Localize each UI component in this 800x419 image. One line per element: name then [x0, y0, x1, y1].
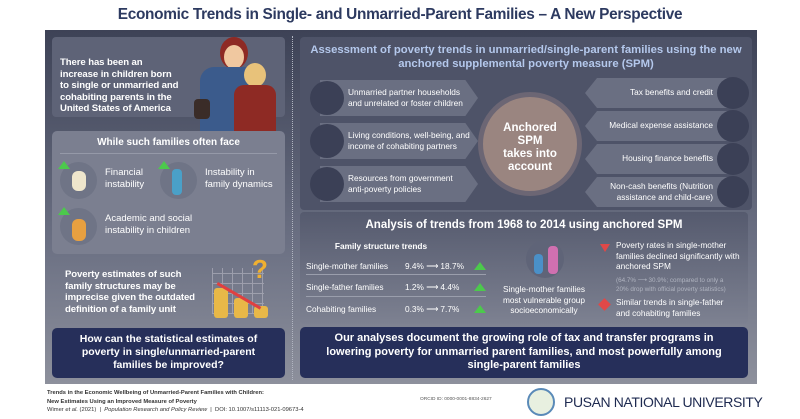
- table: family structure trends: 1.2% ⟶ 4.4%: [405, 282, 459, 292]
- text: intro: increase in children born: [60, 68, 172, 80]
- panel: assessment: [300, 37, 752, 210]
- item: family dynamics: [158, 161, 273, 199]
- illustration: mother and child: [194, 37, 276, 131]
- text: poverty estimates: definition of a family unit: [65, 304, 176, 314]
- item: financial: instability: [105, 179, 144, 190]
- heading: assessment: anchored supplemental poverty measure (SPM): [398, 58, 654, 70]
- footer: citation: New Estimates Using an Improved Measure of Poverty: [47, 398, 197, 404]
- item: living conditions: income of cohabiting partners: [348, 141, 457, 151]
- table: family structure trends: 0.3% ⟶ 7.7%: [405, 304, 459, 314]
- text: poverty rate findings: 20% drop with official poverty statistics): [616, 286, 726, 293]
- text: poverty estimates: Poverty estimates of such: [65, 269, 181, 280]
- text: poverty rate findings: (64.7% ⟶ 30.9%; compared to only a: [616, 277, 723, 284]
- item: financial: Financial: [105, 167, 143, 178]
- icon + text: single-mother vulnerable: Single-mother families: [503, 284, 585, 294]
- item: unmarried partner: Unmarried partner households: [348, 87, 460, 97]
- footer: orcid: ORCID ID: 0000-0001-8834-2627: [420, 397, 492, 402]
- item: medical: [585, 110, 749, 142]
- heading: while such families: While such families often face: [97, 137, 240, 148]
- callout: conclusion: Our analyses document the growing role of tax and transfer programs in: [335, 332, 713, 344]
- table: family structure trends: Family structure trends: [335, 241, 427, 251]
- table: family structure trends: Single-mother families: [306, 261, 388, 271]
- item: resources: Resources from government: [348, 173, 453, 183]
- title: Economic Trends in Single- and Unmarried-Parent Families – A New Perspective: [118, 6, 682, 23]
- table: family structure trends: [306, 241, 486, 314]
- callout: conclusion: [300, 327, 748, 378]
- callout: how can estimates be improved: families be improved?: [113, 359, 224, 371]
- panel: analysis: [300, 212, 748, 324]
- item: living conditions: [310, 123, 478, 159]
- text: poverty rate findings: [598, 240, 740, 318]
- item: tax: Tax benefits and credit: [630, 87, 713, 97]
- item: housing: Housing finance benefits: [622, 153, 713, 163]
- item: academic: Academic and social: [105, 213, 192, 224]
- item: academic: [58, 207, 192, 245]
- divider: [292, 36, 293, 380]
- item: medical: Medical expense assistance: [609, 120, 713, 130]
- text: poverty rate findings: Poverty rates in single-mother: [616, 240, 726, 250]
- heading: analysis: Analysis of trends from 1968 to 2014 using anchored SPM: [366, 219, 682, 231]
- item: academic: instability in children: [105, 225, 190, 236]
- panel: left intro: [52, 37, 285, 117]
- item: family dynamics: family dynamics: [205, 179, 273, 190]
- callout: conclusion: single-parent families: [467, 359, 581, 371]
- item: resources: [310, 166, 478, 202]
- item: unmarried partner: [310, 80, 478, 116]
- text: intro: [60, 57, 178, 114]
- icon: falling chart with coins: ?: [252, 254, 268, 284]
- logo: university seal: [527, 388, 555, 416]
- circle: anchored SPM: account: [508, 161, 552, 173]
- table: family structure trends: Cohabiting families: [306, 304, 376, 314]
- item: non-cash: [585, 176, 749, 208]
- logo: university name: PUSAN NATIONAL UNIVERSITY: [564, 394, 762, 410]
- text: poverty rate findings: families declined significantly with: [616, 250, 740, 260]
- table: family structure trends: Single-father families: [306, 282, 383, 292]
- item: non-cash: Non-cash benefits (Nutrition: [610, 181, 713, 191]
- item: tax: [585, 77, 749, 109]
- callout: conclusion: lowering poverty for unmarried parent families, and most powerfully among: [326, 346, 722, 358]
- circle: anchored SPM: takes into: [503, 148, 557, 160]
- icon + text: single-mother vulnerable: most vulnerable group: [503, 294, 585, 304]
- heading: assessment: [310, 44, 742, 70]
- main panel: [45, 30, 757, 384]
- panel: families face: [52, 131, 285, 254]
- callout: how can estimates be improved: How can the statistical estimates of: [80, 333, 257, 345]
- text: intro: cohabiting parents in the: [60, 92, 172, 102]
- heading: assessment: Assessment of poverty trends in unmarried/single-parent families using the new: [310, 44, 742, 56]
- text: poverty estimates: imprecise given the outdated: [65, 292, 195, 303]
- text: intro: to single or unmarried and: [60, 80, 178, 91]
- text: intro: There has been an: [60, 57, 143, 68]
- item: living conditions: Living conditions, well-being, and: [348, 130, 470, 140]
- item: housing: [585, 143, 749, 175]
- item: resources: anti-poverty policies: [348, 184, 421, 194]
- item: family dynamics: Instability in: [205, 167, 255, 178]
- icon + text: single-mother vulnerable: [503, 246, 585, 315]
- icon + text: single-mother vulnerable: socioeconomically: [510, 305, 578, 315]
- text: intro: United States of America: [60, 103, 171, 114]
- text: poverty rate findings: Similar trends in single-father: [616, 297, 723, 307]
- item: financial: [58, 161, 144, 199]
- circle: anchored SPM: SPM: [518, 135, 542, 147]
- circle: anchored SPM: Anchored: [503, 122, 557, 134]
- footer: citation: [47, 390, 304, 413]
- icon: falling chart with coins: [212, 254, 268, 318]
- circle: anchored SPM: [478, 92, 582, 196]
- text: poverty estimates: [65, 269, 195, 314]
- text: poverty rate findings: and cohabiting families: [616, 308, 700, 318]
- footer: citation: Wimer et al. (2021) | Population Research and Policy Review | DOI: 10.1007/s11113-021-09673-4: [47, 407, 304, 413]
- footer: citation: Trends in the Economic Wellbeing of Unmarried-Parent Families with Children:: [47, 390, 264, 396]
- callout: how can estimates be improved: [52, 328, 285, 378]
- item: non-cash: assistance and child-care): [617, 192, 713, 202]
- item: unmarried partner: and unrelated or foster children: [348, 98, 463, 108]
- table: family structure trends: 9.4% ⟶ 18.7%: [405, 261, 464, 271]
- callout: how can estimates be improved: poverty in single/unmarried-parent: [82, 346, 255, 358]
- text: poverty estimates: family structures may be: [65, 280, 176, 292]
- text: poverty rate findings: anchored SPM: [616, 261, 671, 271]
